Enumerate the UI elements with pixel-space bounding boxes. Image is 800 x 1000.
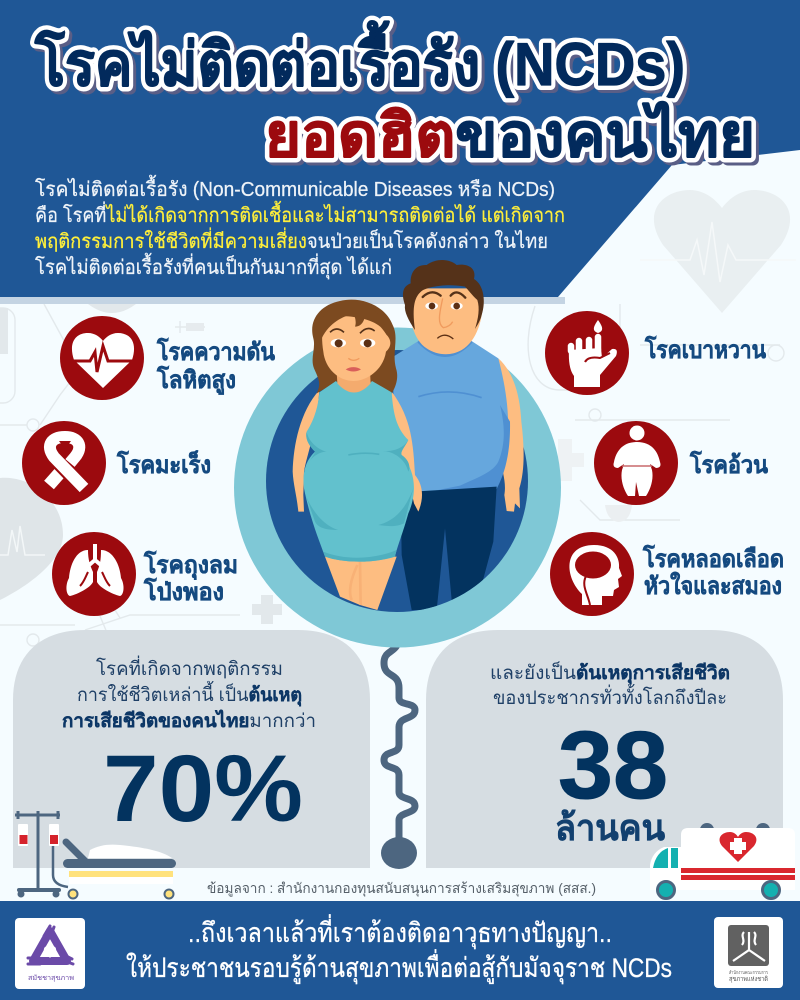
disease: cancer: โรคมะเร็ง — [116, 450, 211, 479]
connector squiggle — [381, 635, 417, 869]
disease: heart and brain vessels: หัวใจและสมอง — [644, 571, 782, 600]
disease: diabetes: โรคเบาหวาน — [644, 335, 767, 364]
title: ยอดฮิตของคนไทย — [265, 100, 755, 169]
disease: cancer — [22, 421, 211, 505]
couple illustration — [293, 260, 524, 610]
disease: heart and brain vessels: โรคหลอดเลือด — [642, 544, 784, 573]
title: ยอดฮิตของคนไทย — [265, 100, 755, 169]
source text: ข้อมูลจาก : สำนักงานกองทุนสนับสนุนการสร้างเสริมสุขภาพ (สสส.) — [207, 880, 596, 897]
panel: right statistic: 38 — [558, 712, 668, 819]
background medical pattern — [0, 190, 796, 646]
title — [34, 20, 758, 172]
disease: obesity: โรคอ้วน — [689, 450, 769, 479]
panel: right statistic — [426, 630, 783, 868]
intro text: พฤติกรรมการใช้ชีวิตที่มีความเสี่ยงจนป่วยเป็นโรคดังกล่าว ในไทย — [35, 227, 548, 253]
intro text: คือ โรคที่ไม่ได้เกิดจากการติดเชื้อและไม่สามารถติดต่อได้ แต่เกิดจาก — [35, 201, 565, 227]
panel: right statistic: และยังเป็นต้นเหตุการเสียชีวิต — [490, 660, 730, 685]
title: โรคไม่ติดต่อเรื้อรัง (NCDs) — [34, 20, 685, 98]
logo: health assembly: สมัชชาสุขภาพ — [28, 974, 74, 982]
panel: right statistic: ของประชากรทั่วทั้งโลกถึงปีละ — [493, 684, 727, 709]
disease: hypertension: โลหิตสูง — [156, 365, 236, 395]
title: โรคไม่ติดต่อเรื้อรัง (NCDs) — [34, 20, 685, 98]
panel: left statistic: โรคที่เกิดจากพฤติกรรม — [96, 655, 283, 680]
disease: obesity — [594, 421, 769, 505]
central circle — [234, 328, 561, 648]
footer text: ..ถึงเวลาแล้วที่เราต้องติดอาวุธทางปัญญา.. — [188, 914, 612, 950]
disease: hypertension — [60, 316, 276, 400]
intro text: โรคไม่ติดต่อเรื้อรังที่คนเป็นกันมากที่สุด ได้แก่ — [35, 253, 392, 280]
footer text: ให้ประชาชนรอบรู้ด้านสุขภาพเพื่อต่อสู้กับมัจจุราช NCDs — [126, 949, 672, 985]
woman — [293, 300, 422, 610]
man — [393, 260, 524, 610]
panel: left statistic — [13, 630, 370, 868]
panel: left statistic: การเสียชีวิตของคนไทยมากกว่า — [62, 709, 316, 732]
disease: emphysema: โป่งพอง — [143, 577, 224, 606]
disease: emphysema: โรคถุงลม — [143, 550, 238, 581]
title: ยอดฮิตของคนไทย — [268, 103, 758, 172]
header banner — [0, 0, 800, 304]
intro text: โรคไม่ติดต่อเรื้อรัง (Non-Communicable Diseases หรือ NCDs) — [35, 175, 555, 201]
disease: emphysema — [52, 532, 238, 616]
panel: right statistic: ล้านคน — [555, 807, 665, 848]
intro text — [35, 175, 565, 280]
panel: left statistic: การใช้ชีวิตเหล่านี้ เป็นต้นเหตุ — [77, 681, 302, 707]
disease: diabetes — [545, 311, 767, 395]
icon: hospital bed and IV stand — [15, 811, 176, 898]
icon: ambulance — [650, 823, 795, 898]
footer text — [126, 914, 672, 985]
disease: hypertension: โรคความดัน — [156, 337, 276, 366]
logo: national health commission: สุขภาพแห่งชาติ — [729, 975, 768, 983]
panel: left statistic: 70% — [103, 736, 303, 842]
disease: heart and brain vessels — [550, 532, 784, 616]
title: โรคไม่ติดต่อเรื้อรัง (NCDs) — [37, 23, 688, 101]
logo: national health commission — [714, 917, 783, 988]
footer band — [0, 901, 800, 1000]
logo: national health commission: สำนักงานคณะกรรมการ — [729, 970, 768, 976]
logo: health assembly — [15, 918, 85, 989]
